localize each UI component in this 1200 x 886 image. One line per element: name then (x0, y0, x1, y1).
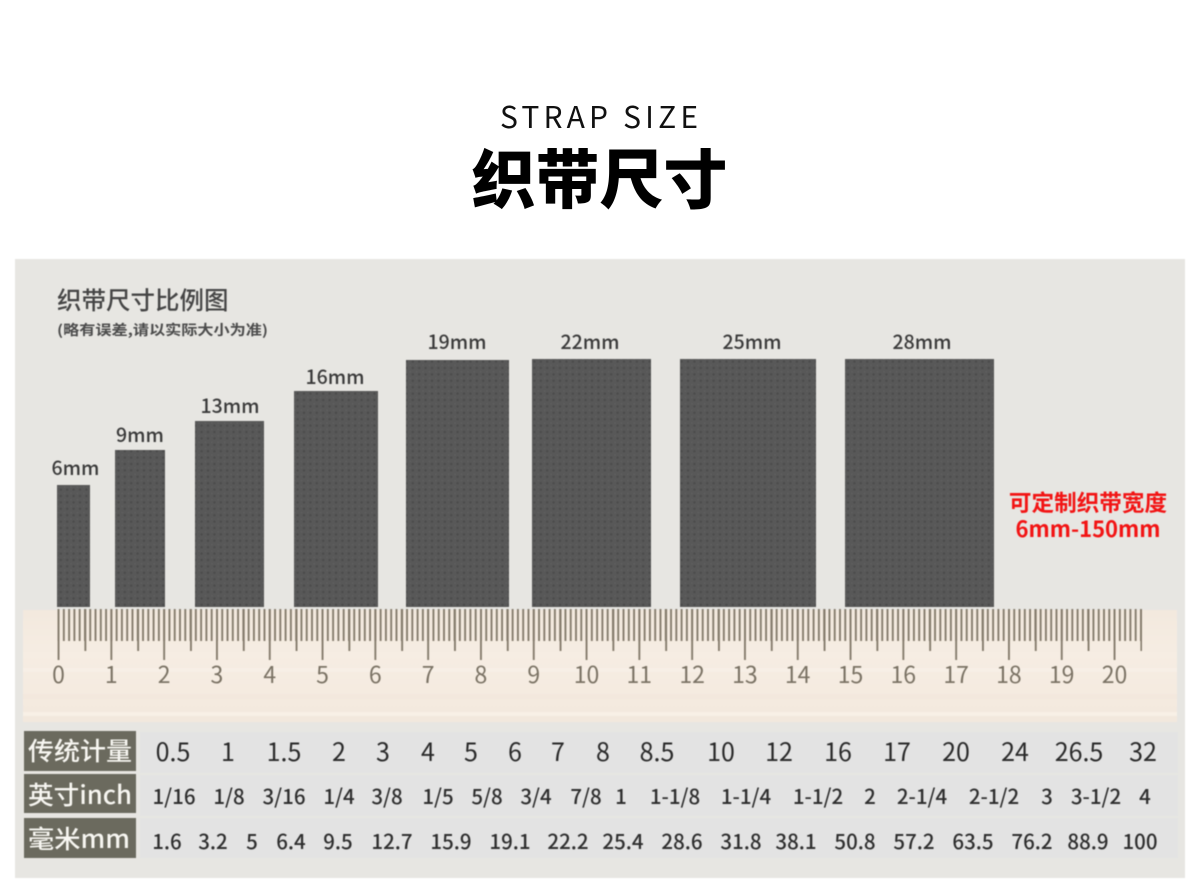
row: inch: 1/5 (422, 780, 454, 810)
row: inch: 3-1/2 (1071, 780, 1121, 810)
row: inch: 4 (1139, 780, 1151, 810)
strap 9mm: 9mm (116, 419, 164, 448)
row: millimetre: 15.9 (430, 825, 472, 855)
ruler numbers: 18 (996, 656, 1022, 690)
row: millimetre: 76.2 (1011, 825, 1053, 855)
ruler numbers: 11 (627, 656, 652, 690)
row: traditional measure: 2 (332, 733, 346, 769)
ruler numbers: 20 (1102, 656, 1127, 690)
row: inch: 3/16 (262, 780, 306, 810)
callout: customizable width: 6mm-150mm (1016, 512, 1160, 544)
row: millimetre: 1.6 (152, 825, 182, 855)
strap 6mm (52, 452, 99, 607)
strap 19mm (406, 326, 509, 607)
strap 13mm (195, 390, 264, 607)
panel note: (略有误差,请以实际大小为准) (57, 320, 268, 340)
row: inch: 1-1/2 (793, 780, 843, 810)
row: traditional measure: 24 (1001, 733, 1029, 769)
row: traditional measure: 5 (464, 733, 478, 769)
ruler numbers: 1 (105, 656, 118, 690)
row: millimetre: 12.7 (371, 825, 413, 855)
row: traditional measure: 20 (942, 733, 970, 769)
strap 28mm: 28mm (892, 326, 952, 355)
row: traditional measure (24, 731, 1178, 773)
row: millimetre: 38.1 (775, 825, 817, 855)
row: traditional measure: 3 (376, 733, 390, 769)
panel heading: 织带尺寸比例图 (57, 282, 228, 317)
ruler numbers: 7 (422, 656, 434, 690)
row: traditional measure: 6 (508, 733, 522, 769)
row: millimetre: 100 (1122, 825, 1158, 855)
row: millimetre: 50.8 (834, 825, 876, 855)
strap 22mm: 22mm (560, 326, 620, 355)
row: inch: 3/8 (371, 780, 403, 810)
row: inch (24, 774, 1178, 816)
row: inch: 1-1/4 (721, 780, 771, 810)
row: traditional measure: 0.5 (156, 733, 190, 769)
row: inch: 7/8 (570, 780, 602, 810)
row: traditional measure: 4 (421, 733, 435, 769)
strap 9mm (115, 419, 165, 607)
row: traditional measure: 12 (765, 733, 793, 769)
row: traditional measure: 7 (551, 733, 565, 769)
row: traditional measure: 16 (824, 733, 852, 769)
ruler ticks (58, 625, 1142, 634)
row: traditional measure: 26.5 (1055, 733, 1103, 769)
title: 织带尺寸: 织带尺寸 (472, 130, 728, 222)
ruler numbers: 14 (785, 656, 811, 690)
ruler (23, 610, 1177, 722)
strap 22mm (532, 326, 651, 607)
row: millimetre: 19.1 (489, 825, 531, 855)
ruler numbers (52, 656, 1127, 690)
row: millimetre: 3.2 (198, 825, 228, 855)
strap 19mm: 19mm (427, 326, 487, 355)
row: traditional measure: 17 (883, 733, 911, 769)
row: traditional measure: 传统计量 (28, 732, 132, 768)
row: millimetre: 31.8 (720, 825, 762, 855)
row: traditional measure: 1.5 (267, 733, 301, 769)
row: millimetre: 9.5 (323, 825, 353, 855)
subtitle: STRAP SIZE: STRAP SIZE (500, 93, 698, 137)
ruler numbers: 2 (158, 656, 170, 690)
ruler numbers: 9 (527, 656, 540, 690)
callout: customizable width (1009, 485, 1167, 544)
ruler numbers: 19 (1049, 656, 1074, 690)
panel: strap size chart (15, 259, 1185, 878)
row: inch: 1/4 (323, 780, 355, 810)
ruler numbers: 15 (838, 656, 863, 690)
row: millimetre: 63.5 (952, 825, 994, 855)
row: traditional measure: 8.5 (640, 733, 674, 769)
row: millimetre: 6.4 (276, 825, 306, 855)
row: inch: 1-1/8 (650, 780, 700, 810)
strap 6mm: 6mm (52, 452, 99, 481)
row: traditional measure: 10 (707, 733, 735, 769)
row: inch: 3 (1041, 780, 1053, 810)
strap 16mm (294, 361, 378, 607)
row: millimetre: 毫米mm (28, 820, 130, 856)
ruler numbers: 16 (891, 656, 916, 690)
ruler numbers: 12 (679, 656, 705, 690)
ruler numbers: 13 (732, 656, 758, 690)
ruler numbers: 8 (475, 656, 487, 690)
row: millimetre: 22.2 (547, 825, 589, 855)
row: inch: 5/8 (471, 780, 503, 810)
row: millimetre: 57.2 (893, 825, 935, 855)
strap 16mm: 16mm (305, 361, 365, 390)
ruler numbers: 4 (263, 656, 276, 690)
row: traditional measure: 8 (596, 733, 610, 769)
strap 28mm (845, 326, 994, 607)
row: traditional measure: 1 (221, 733, 235, 769)
strap 25mm (680, 326, 816, 607)
ruler numbers: 10 (574, 656, 599, 690)
row: inch: 1/16 (152, 780, 196, 810)
row: millimetre: 25.4 (602, 825, 644, 855)
row: millimetre: 28.6 (661, 825, 703, 855)
row: inch: 英寸inch (28, 776, 132, 812)
row: inch: 1/8 (213, 780, 245, 810)
ruler numbers: 6 (369, 656, 382, 690)
row: inch: 2-1/2 (969, 780, 1019, 810)
row: inch: 3/4 (520, 780, 552, 810)
row: traditional measure: 32 (1129, 733, 1157, 769)
callout: customizable width: 可定制织带宽度 (1009, 485, 1167, 518)
row: inch: 2-1/4 (897, 780, 947, 810)
ruler numbers: 5 (316, 656, 329, 690)
size conversion table (24, 731, 1178, 858)
row: millimetre (24, 818, 1178, 858)
row: millimetre: 5 (246, 825, 258, 855)
row: millimetre: 88.9 (1067, 825, 1109, 855)
strap 13mm: 13mm (200, 390, 260, 419)
row: inch: 2 (864, 780, 876, 810)
ruler numbers: 17 (943, 656, 969, 690)
strap bars with size labels (52, 326, 994, 607)
strap 25mm: 25mm (722, 326, 782, 355)
row: inch: 1 (615, 780, 627, 810)
ruler numbers: 3 (211, 656, 223, 690)
ruler numbers: 0 (52, 656, 65, 690)
